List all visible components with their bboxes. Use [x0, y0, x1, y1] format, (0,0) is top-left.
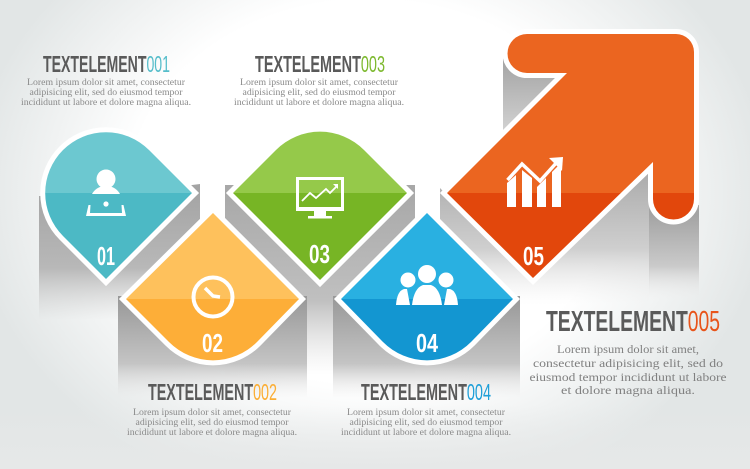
body 002: adipisicing elit, sed do eiusmod tempor — [136, 418, 289, 428]
heading 002: TEXTELEMENT002 — [148, 379, 277, 405]
body 001: incididunt ut labore et dolore magna aliqua. — [21, 98, 191, 108]
text block 004 — [341, 379, 511, 438]
body 005: consectetur adipisicing elit, sed do — [533, 356, 723, 370]
panel: step 2 yellow-orange — [126, 213, 299, 360]
icon: person with laptop — [86, 170, 126, 216]
number 01: 01 — [97, 241, 115, 271]
text block 003 — [234, 51, 404, 108]
text block 005 — [530, 306, 726, 397]
number 04: 04 — [416, 328, 438, 358]
panel: step 3 green — [233, 132, 407, 280]
icon: bar chart with arrow — [507, 157, 563, 207]
body 004: Lorem ipsum dolor sit amet, consectetur — [347, 408, 506, 418]
number 02: 02 — [202, 328, 223, 358]
heading 003: TEXTELEMENT003 — [255, 51, 385, 77]
number 03: 03 — [309, 239, 330, 269]
icon: clock — [194, 278, 232, 316]
shadow: arrow under edges — [440, 162, 653, 305]
panel: step 1 teal — [45, 132, 192, 279]
panel: step 5 arrow — [447, 34, 694, 278]
background bottom tint — [0, 405, 750, 469]
body 004: incididunt ut labore et dolore magna aliqua. — [341, 428, 511, 438]
shadow: arrow upper notch — [503, 54, 570, 132]
icon: three people — [396, 265, 458, 305]
body 003: Lorem ipsum dolor sit amet, consectetur — [240, 78, 399, 88]
panel: step 4 blue — [341, 213, 513, 360]
text block 001 — [21, 51, 191, 108]
body 005: Lorem ipsum dolor sit amet, — [557, 342, 699, 356]
shadow: step 2 extrusion — [118, 296, 307, 398]
shadow: step 3 extrusion — [225, 185, 415, 375]
body 005: et dolore magna aliqua. — [561, 383, 695, 397]
body 004: adipisicing elit, sed do eiusmod tempor — [350, 418, 503, 428]
body 001: Lorem ipsum dolor sit amet, consectetur — [27, 78, 186, 88]
shadow: arrow stem — [649, 205, 699, 300]
shadow: step 4 extrusion — [333, 296, 520, 398]
icon: monitor with chart — [296, 178, 344, 218]
heading 001: TEXTELEMENT001 — [43, 51, 170, 77]
body 003: incididunt ut labore et dolore magna aliqua. — [234, 98, 404, 108]
heading 004: TEXTELEMENT004 — [361, 379, 491, 405]
body 002: incididunt ut labore et dolore magna aliqua. — [127, 428, 297, 438]
body 002: Lorem ipsum dolor sit amet, consectetur — [133, 408, 292, 418]
text block 002 — [127, 379, 297, 438]
shadow: step 1 extrusion — [39, 184, 200, 320]
body 003: adipisicing elit, sed do eiusmod tempor — [242, 88, 396, 98]
body 005: eiusmod tempor incididunt ut labore — [530, 370, 726, 384]
body 001: adipisicing elit, sed do eiusmod tempor — [30, 88, 183, 98]
number 05: 05 — [523, 241, 544, 271]
